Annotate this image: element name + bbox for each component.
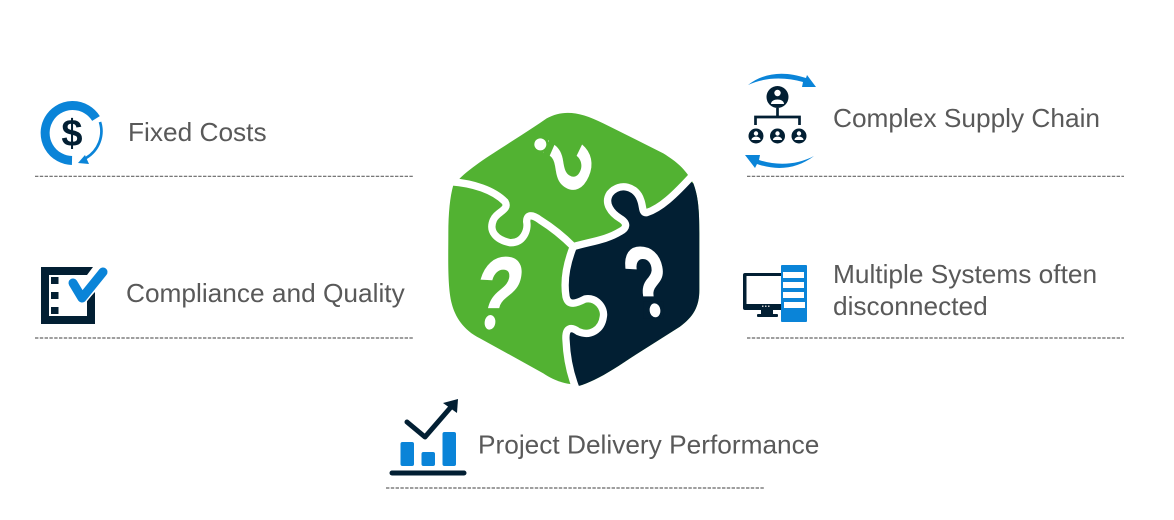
label: Project Delivery Performance (478, 430, 819, 460)
icon: dollar cycle (45, 106, 101, 164)
navy puzzle piece (565, 180, 699, 387)
icon: computer and server (743, 265, 807, 322)
label: Compliance and Quality (126, 278, 406, 308)
question mark: top: ? (507, 106, 615, 211)
label: Complex Supply Chain (833, 103, 1100, 133)
question mark: left: ? (464, 238, 533, 351)
icon: rising bar chart (392, 399, 464, 473)
item: Project Delivery Performance (386, 399, 819, 488)
item: Complex Supply Chain (745, 74, 1124, 176)
item: Multiple Systems often disconnected (743, 259, 1124, 338)
item: Fixed Costs (35, 106, 413, 176)
white puzzle seams (451, 173, 695, 389)
icon: checklist (41, 267, 103, 324)
green hexagon body (448, 113, 699, 386)
label: Fixed Costs (128, 117, 267, 147)
question mark: right: ? (615, 228, 680, 338)
icon: dollar cycle: $ (61, 113, 83, 155)
puzzle cube (448, 106, 699, 389)
item: Compliance and Quality (35, 267, 413, 338)
label: disconnected (833, 291, 988, 321)
icon: org chart with arrows (745, 74, 816, 168)
label: Multiple Systems often (833, 259, 1097, 289)
